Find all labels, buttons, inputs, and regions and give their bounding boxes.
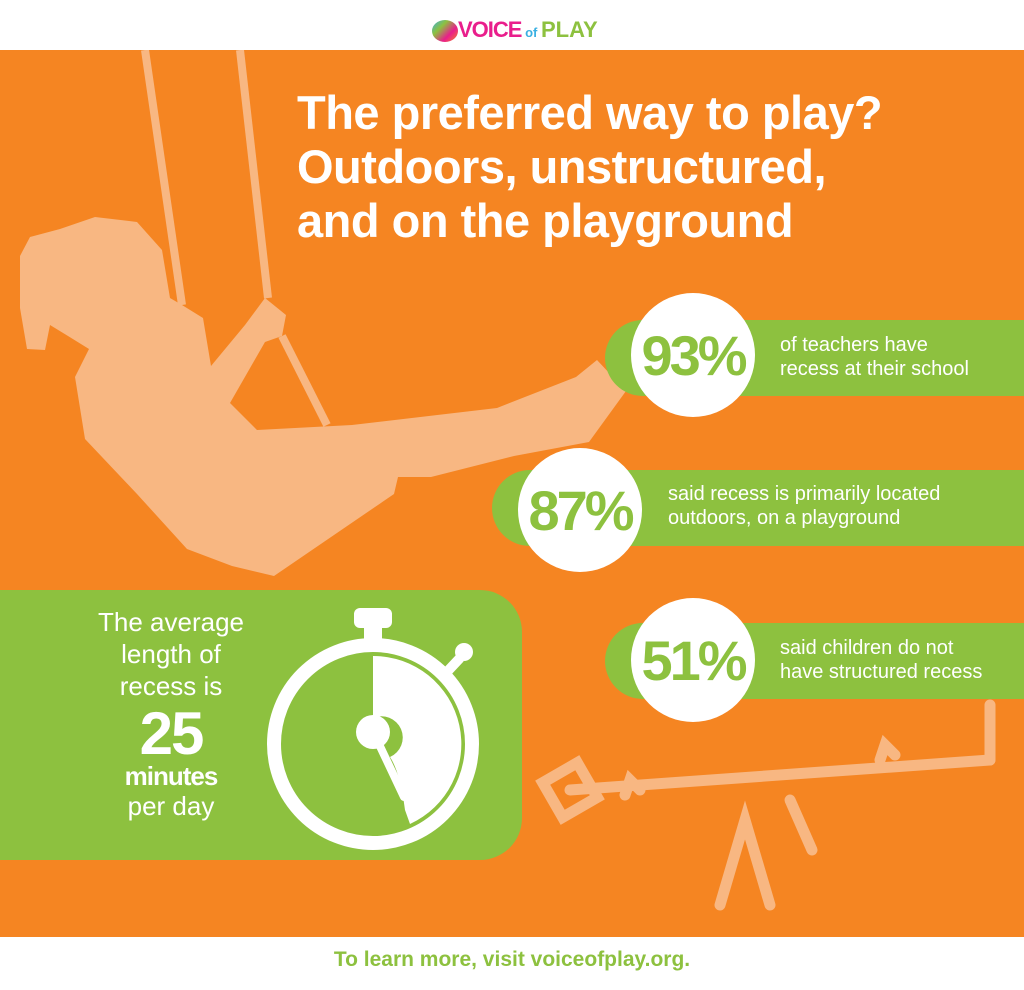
title bbox=[297, 86, 882, 247]
logo: VOICE of PLAY bbox=[458, 17, 598, 42]
text block: 25 minutes per day bbox=[98, 607, 244, 821]
stat: 51%: have structured recess bbox=[780, 661, 982, 683]
stat: 87% bbox=[492, 448, 1024, 572]
text block: 25 minutes per day: minutes bbox=[125, 761, 217, 791]
stat: 93%: 93% bbox=[641, 324, 745, 386]
title: Outdoors, unstructured, bbox=[297, 140, 826, 193]
text block: 25 minutes per day: 25 bbox=[140, 700, 202, 767]
stat: 87%: said recess is primarily located bbox=[668, 483, 940, 505]
stat: 93% bbox=[605, 293, 1024, 417]
illustration: seesaw bbox=[543, 705, 990, 905]
text block: 25 minutes per day: The average bbox=[98, 607, 244, 637]
footer: To learn more, visit voiceofplay.org. bbox=[334, 948, 690, 971]
stat: 87%: outdoors, on a playground bbox=[668, 507, 900, 529]
stat: 51%: 51% bbox=[641, 628, 745, 692]
text block: 25 minutes per day: recess is bbox=[120, 671, 222, 701]
title: The preferred way to play? bbox=[297, 86, 882, 139]
icon: stopwatch bbox=[267, 608, 479, 850]
text block: 25 minutes per day: per day bbox=[128, 791, 214, 821]
stat: 51% bbox=[605, 598, 1024, 722]
stat: 87%: 87% bbox=[528, 478, 632, 542]
stat: 93%: recess at their school bbox=[780, 358, 969, 380]
title: and on the playground bbox=[297, 194, 793, 247]
stat: 93%: of teachers have bbox=[780, 334, 928, 356]
text block: 25 minutes per day: length of bbox=[121, 639, 221, 669]
stat: 51%: said children do not bbox=[780, 637, 953, 659]
panel: average recess length bbox=[0, 590, 522, 860]
